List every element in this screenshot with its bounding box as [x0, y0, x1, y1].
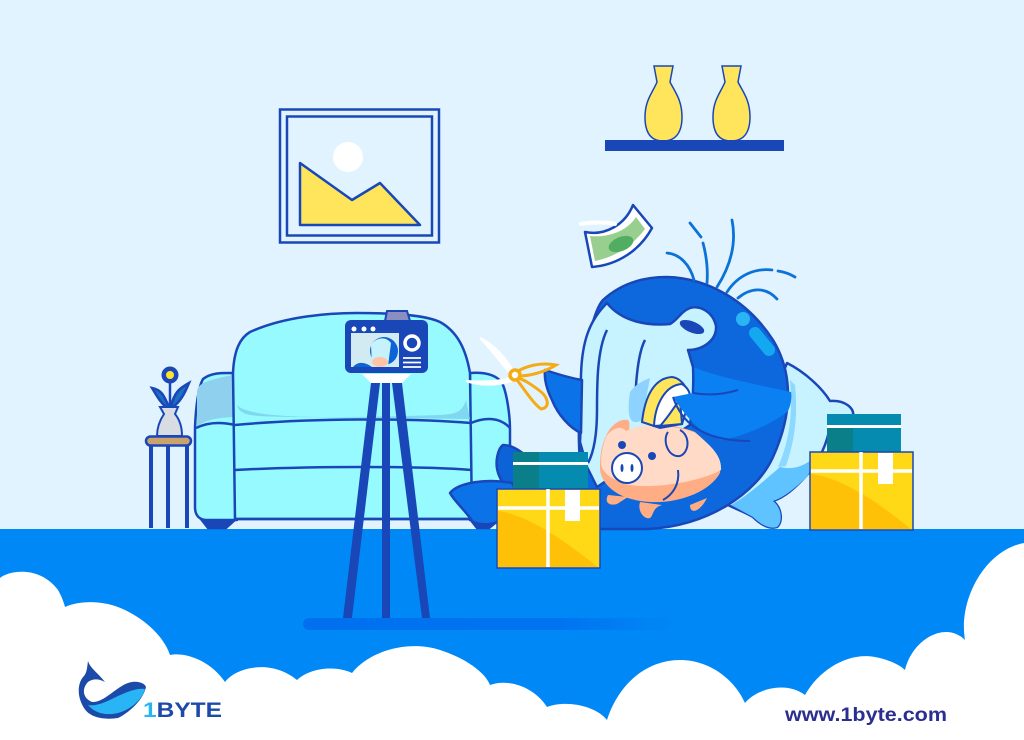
sofa [195, 313, 510, 528]
package stack right [810, 414, 913, 530]
main body [500, 277, 788, 529]
water spout [667, 220, 795, 299]
left tail flukes [497, 445, 530, 490]
picture frame [280, 110, 439, 242]
floor [0, 529, 1024, 740]
eye [678, 317, 706, 337]
logo [79, 661, 222, 722]
logo whale [79, 661, 146, 719]
wall background [0, 0, 1024, 530]
piggy bank [600, 420, 721, 518]
package stack left [497, 452, 600, 568]
belly shadow behind coin [629, 378, 650, 422]
right tail fin [728, 363, 853, 528]
side table with flower [146, 366, 191, 528]
whale arm holding scissors [545, 370, 582, 433]
whale [450, 220, 853, 529]
camera [345, 311, 428, 383]
website url: www.1byte.com [784, 704, 947, 726]
highlights [736, 312, 750, 326]
scissors [466, 338, 556, 409]
coin and whale hand [642, 377, 791, 441]
belly [580, 303, 716, 487]
wall shelf with vases [605, 66, 784, 151]
clouds [0, 543, 1024, 740]
floor shadow strip [303, 618, 673, 630]
body lighter band [673, 367, 791, 440]
flying banknote [581, 205, 652, 267]
tripod [343, 383, 430, 618]
logo wordmark: 1BYTE [143, 699, 222, 722]
